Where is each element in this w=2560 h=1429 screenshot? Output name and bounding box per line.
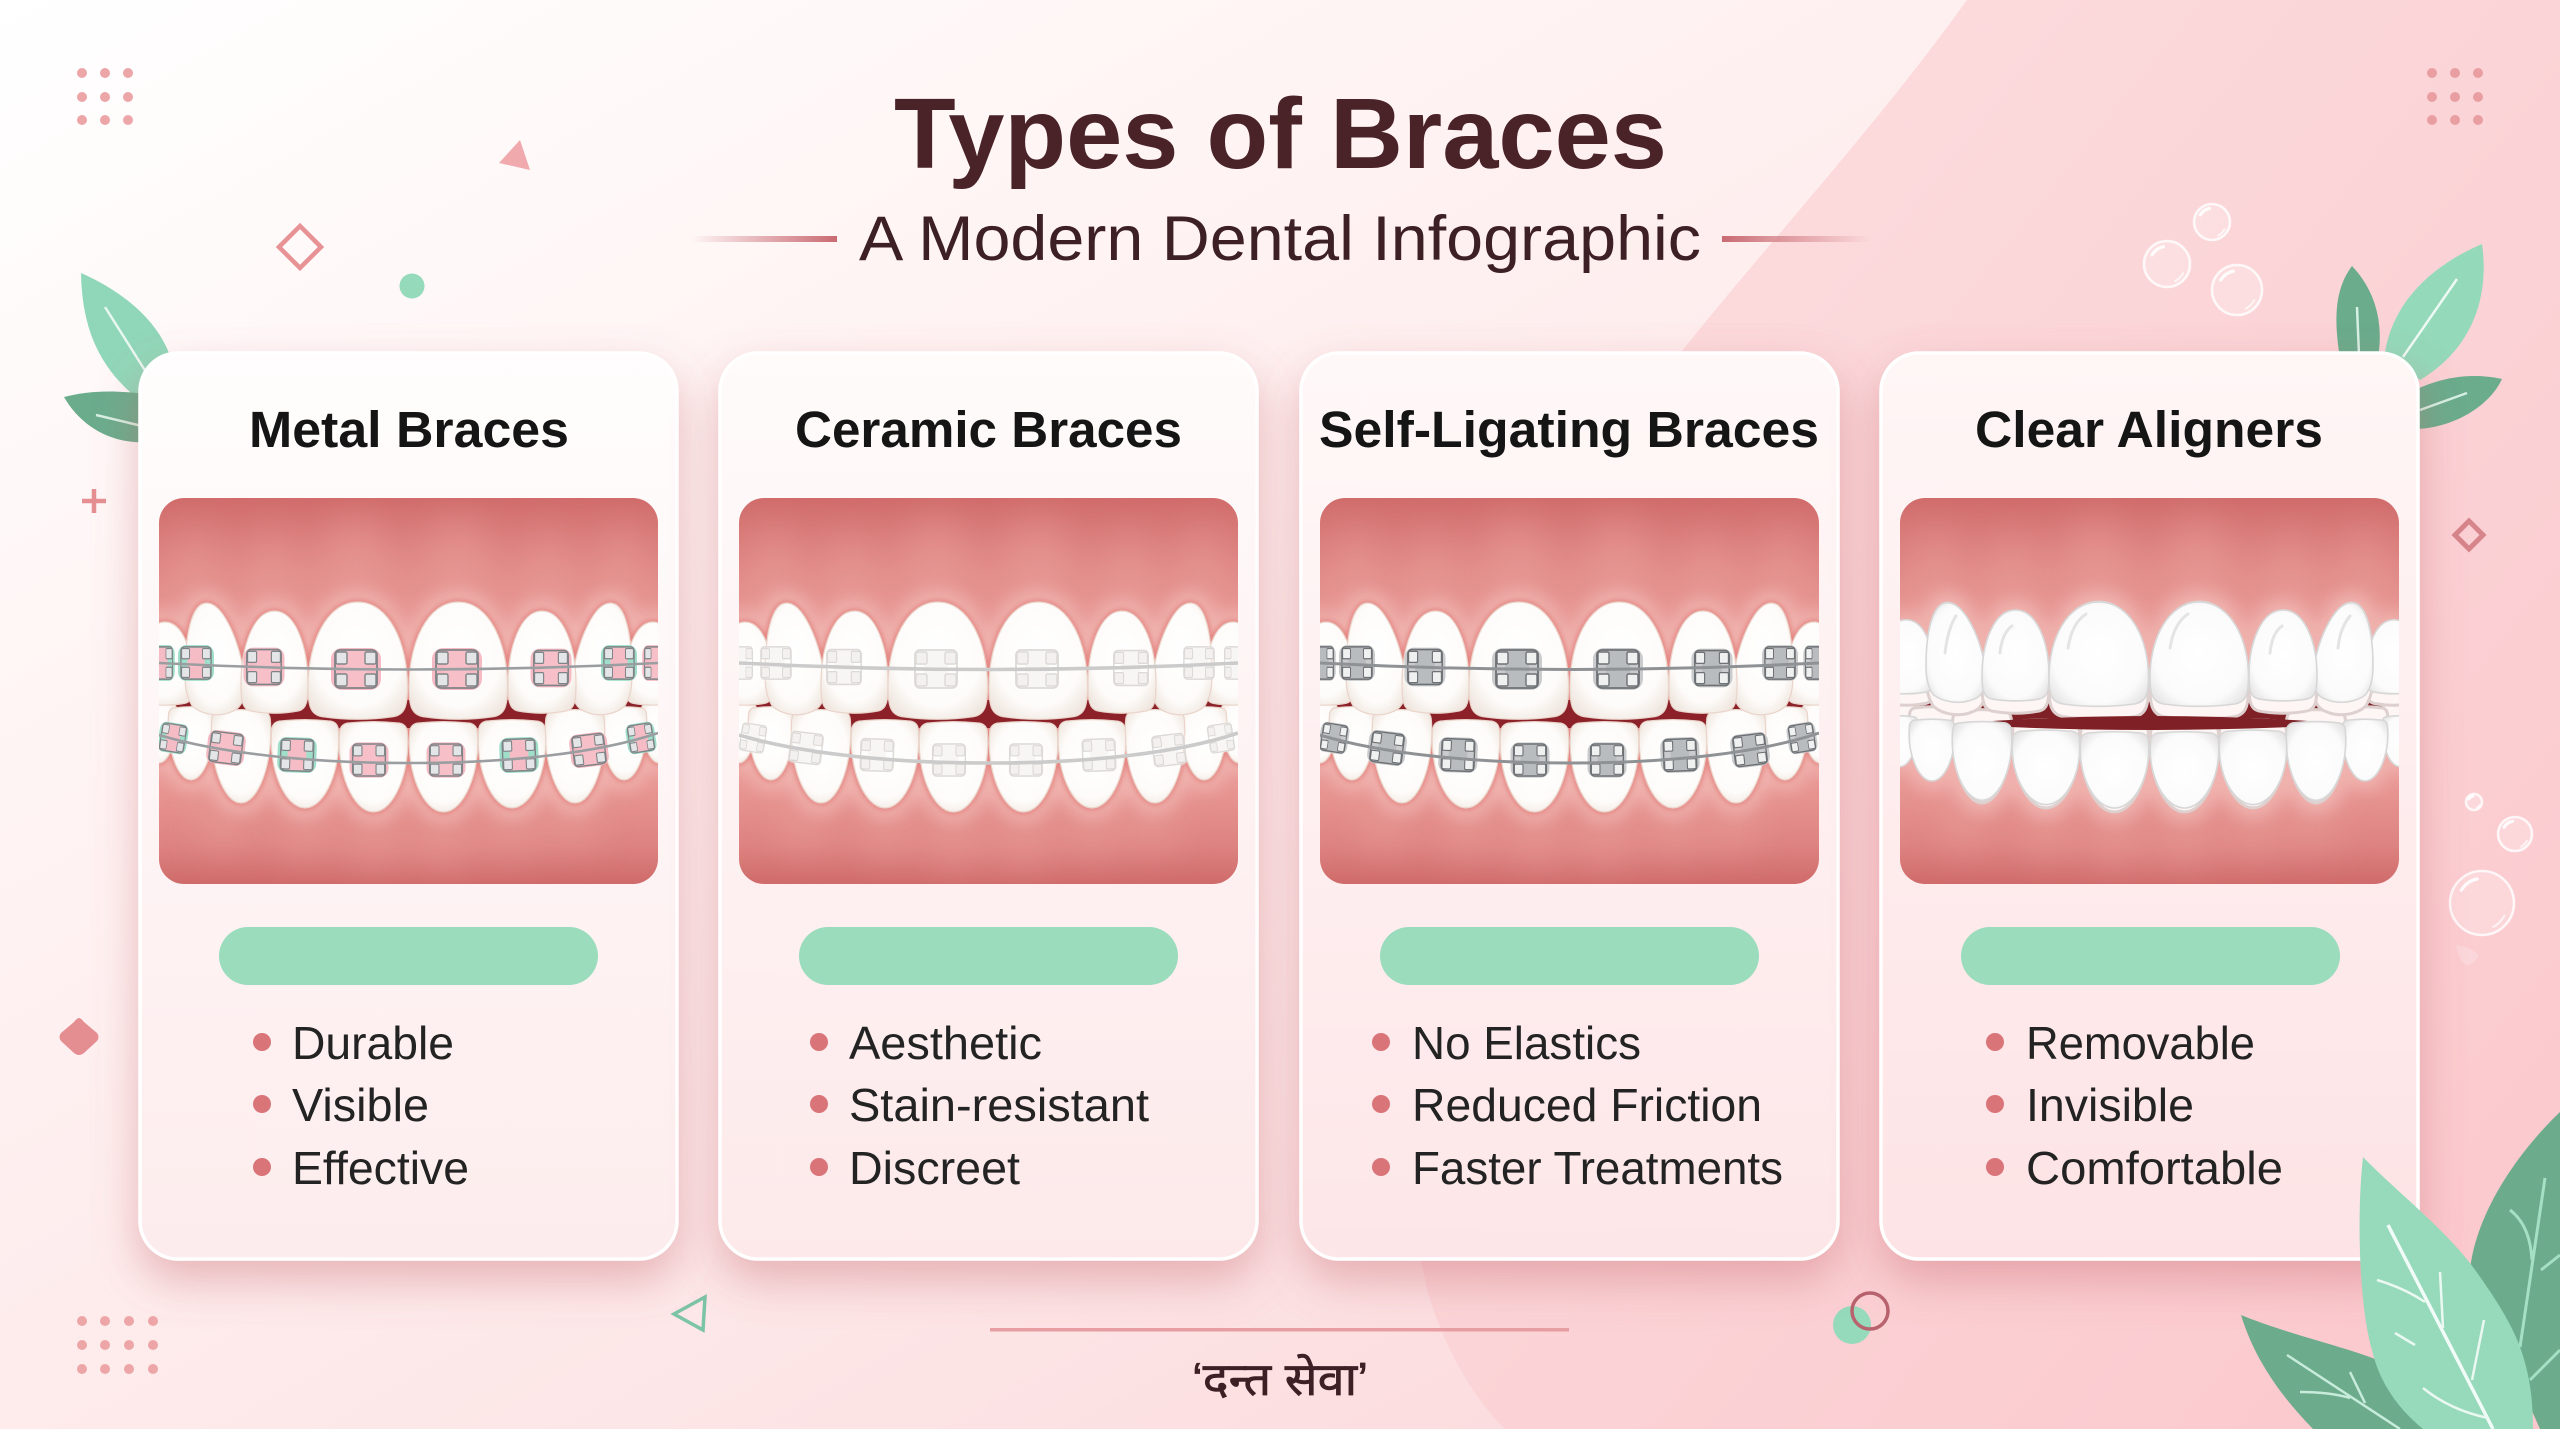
decor: plus sign <box>82 489 106 513</box>
heading: Ceramic Braces <box>795 401 1182 458</box>
empty green pill <box>799 927 1178 985</box>
decor: top-left dot grid <box>77 68 133 125</box>
decor: top-right dot grid <box>2427 68 2483 125</box>
card background <box>140 353 677 1259</box>
feature list: Comfortable <box>2026 1142 2283 1194</box>
feature list: Stain-resistant <box>849 1079 1149 1131</box>
card background <box>1881 353 2418 1259</box>
footer rule <box>990 1328 1569 1332</box>
leaves: top-right <box>2336 244 2502 429</box>
decor: green dot <box>400 274 424 298</box>
panel: clear aligners <box>1878 353 2422 1259</box>
illustration: ceramic braces on teeth <box>717 498 1261 884</box>
feature list <box>810 1017 1149 1194</box>
decor: top-right bubbles <box>2144 204 2262 315</box>
panel: ceramic braces <box>717 353 1261 1259</box>
leaves: bottom-right <box>2241 1112 2560 1429</box>
decor: right side bubbles <box>2450 794 2532 966</box>
heading: Self-Ligating Braces <box>1319 401 1819 458</box>
feature list: Visible <box>292 1079 429 1131</box>
footer caption: ‘दन्त सेवा’ <box>1192 1352 1368 1405</box>
empty green pill <box>1380 927 1759 985</box>
heading: Metal Braces <box>249 401 569 458</box>
feature list: No Elastics <box>1412 1017 1641 1069</box>
empty green pill <box>219 927 598 985</box>
feature list: Effective <box>292 1142 469 1194</box>
illustration: clear aligner trays on teeth <box>1878 498 2422 884</box>
feature list: Discreet <box>849 1142 1020 1194</box>
subtitle with side rules <box>691 204 1870 274</box>
decor: outlined green triangle <box>674 1297 705 1330</box>
decor: bottom-left dot grid <box>77 1316 158 1374</box>
decor: outlined diamond <box>279 226 321 268</box>
feature list <box>1986 1017 2283 1194</box>
card background <box>720 353 1257 1259</box>
subtitle with side rules: A Modern Dental Infographic <box>859 204 1701 274</box>
decor: solid diamond <box>60 1018 98 1055</box>
feature list: Invisible <box>2026 1079 2194 1131</box>
empty green pill <box>1961 927 2340 985</box>
feature list: Reduced Friction <box>1412 1079 1762 1131</box>
decor: green circle with ring <box>1833 1293 1888 1344</box>
title: Types of Braces <box>894 78 1667 190</box>
feature list: Removable <box>2026 1017 2255 1069</box>
feature list <box>1372 1017 1783 1194</box>
panel: self-ligating braces <box>1298 353 1842 1259</box>
decor: pink triangle <box>499 140 530 170</box>
feature list <box>253 1017 469 1194</box>
feature list: Faster Treatments <box>1412 1142 1783 1194</box>
panel: metal braces <box>137 353 681 1259</box>
heading: Clear Aligners <box>1975 401 2323 458</box>
illustration: self-ligating braces on teeth <box>1298 498 1842 884</box>
feature list: Aesthetic <box>849 1017 1042 1069</box>
leaves: top-left <box>64 273 172 442</box>
card background <box>1301 353 1838 1259</box>
feature list: Durable <box>292 1017 454 1069</box>
decor: right outlined diamond <box>2455 521 2483 549</box>
illustration: metal braces on teeth <box>137 498 681 884</box>
